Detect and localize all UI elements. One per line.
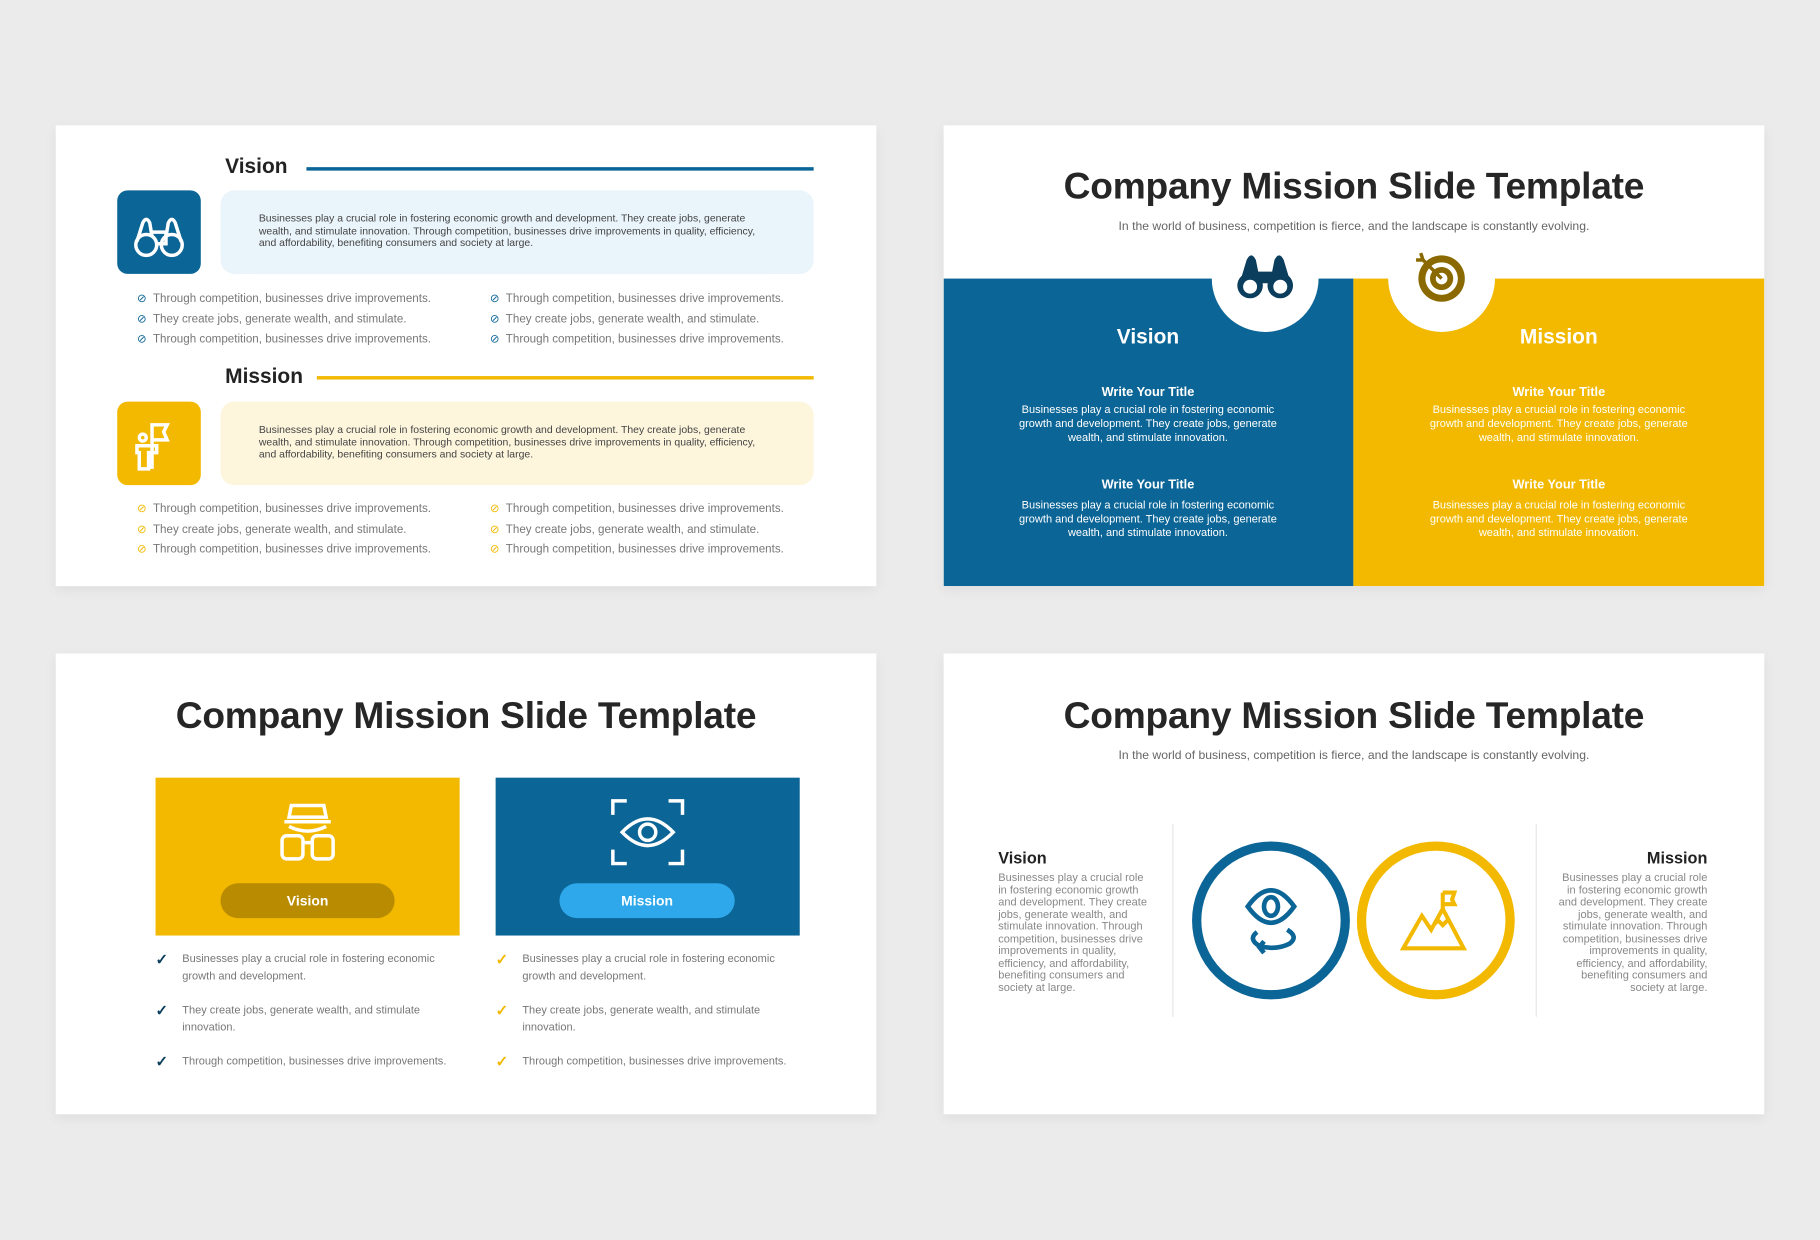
text: mission: Businesses play a crucial role in fostering economic growth and development. They create jobs, generate wealth, and stimulate innovation. Through competition, businesses drive improvements in quality, efficiency, and affordability, benefiting consumers and society at large. <box>1559 872 1707 994</box>
list: mission: ✓ <box>496 1002 508 1019</box>
block: vision: Vision <box>1117 325 1179 348</box>
list: mission <box>496 951 786 1070</box>
text box: vision: Businesses play a crucial role in fostering economic growth and development. They create jobs, generate wealth, and stimulate innovation. Through competition, businesses drive improvements in quality, efficiency, and affordability, benefiting consumers and society at large. <box>259 212 755 249</box>
list: vision: ✓ <box>156 1053 168 1070</box>
text: vision: Businesses play a crucial role in fostering economic growth and development. They create jobs, generate wealth, and stimulate innovation. Through competition, businesses drive improvements in quality, efficiency, and affordability, benefiting consumers and society at large. <box>998 872 1147 994</box>
checklist: vision: ⊘ Through competition, businesses drive improvements. <box>490 292 784 305</box>
block: vision: Businesses play a crucial role in fostering economic growth and development. They create jobs, generate wealth, and stimulate innovation. <box>1019 499 1277 540</box>
card: vision <box>156 778 460 936</box>
checklist: vision: ⊘ They create jobs, generate wealth, and stimulate. <box>490 313 759 326</box>
card: mission <box>496 778 800 936</box>
icon: vision circle <box>1192 842 1350 1000</box>
button: mission: Mission <box>621 893 673 909</box>
block: vision: Businesses play a crucial role in fostering economic growth and development. They create jobs, generate wealth, and stimulate innovation. <box>1019 404 1277 445</box>
checklist: vision: ⊘ Through competition, businesses drive improvements. <box>137 333 431 346</box>
list: vision: ✓ <box>156 1002 168 1019</box>
title: Company Mission Slide Template <box>1064 694 1644 736</box>
panel: cards <box>56 653 876 1114</box>
text: vision: Vision <box>998 848 1047 867</box>
icon: person with flag <box>117 402 201 485</box>
button: mission <box>559 883 735 918</box>
heading: mission: Mission <box>225 364 303 388</box>
title: Company Mission Slide Template <box>176 694 756 736</box>
checklist: mission: ⊘ Through competition, businesses drive improvements. <box>137 503 431 515</box>
subtitle: In the world of business, competition is fierce, and the landscape is constantly evolving. <box>1119 749 1589 763</box>
checklist: mission <box>137 503 784 556</box>
text: mission: Mission <box>1647 848 1707 867</box>
checklist: vision: ⊘ They create jobs, generate wealth, and stimulate. <box>137 313 407 326</box>
title: Company Mission Slide Template <box>1064 165 1644 207</box>
checklist: mission: ⊘ Through competition, businesses drive improvements. <box>490 503 784 515</box>
text box: mission <box>221 402 814 485</box>
list: vision: Through competition, businesses drive improvements. <box>182 1055 446 1068</box>
list: mission: ✓ <box>496 951 508 968</box>
block: vision: Write Your Title <box>1102 478 1194 492</box>
list: mission: ✓ <box>496 1053 508 1070</box>
block: mission: Write Your Title <box>1512 385 1605 399</box>
checklist: mission: ⊘ They create jobs, generate wealth, and stimulate. <box>137 523 407 536</box>
icon: spy binoculars <box>280 804 335 861</box>
block: vision: Write Your Title <box>1102 385 1194 399</box>
icon: binoculars <box>117 190 201 274</box>
panel: circles <box>944 653 1764 1114</box>
checklist: vision: ⊘ Through competition, businesses drive improvements. <box>137 292 431 305</box>
list: vision: ✓ <box>156 951 168 968</box>
list: vision: They create jobs, generate wealth, and stimulate innovation. <box>182 1004 420 1034</box>
block: mission <box>1353 279 1764 586</box>
block: mission: Businesses play a crucial role in fostering economic growth and development. They create jobs, generate wealth, and stimulate innovation. <box>1430 404 1688 445</box>
checklist: mission: ⊘ Through competition, businesses drive improvements. <box>490 543 784 556</box>
checklist: mission: ⊘ They create jobs, generate wealth, and stimulate. <box>490 523 759 536</box>
panel: vision and mission list <box>56 125 876 586</box>
list: mission: They create jobs, generate wealth, and stimulate innovation. <box>522 1004 760 1034</box>
icon: binoculars circle <box>1212 225 1319 332</box>
checklist: vision <box>137 292 784 346</box>
list: vision: Businesses play a crucial role in fostering economic growth and development. <box>182 953 435 983</box>
icon: eye scan <box>611 799 684 866</box>
text box: mission: Businesses play a crucial role in fostering economic growth and development. They create jobs, generate wealth, and stimulate innovation. Through competition, businesses drive improvements in quality, efficiency, and affordability, benefiting consumers and society at large. <box>259 424 755 460</box>
list: mission: Businesses play a crucial role in fostering economic growth and development. <box>522 953 775 983</box>
subtitle: In the world of business, competition is fierce, and the landscape is constantly evolving. <box>1119 219 1589 233</box>
list: vision <box>156 951 446 1070</box>
button: vision: Vision <box>287 893 328 909</box>
block: mission: Businesses play a crucial role in fostering economic growth and development. They create jobs, generate wealth, and stimulate innovation. <box>1430 499 1688 540</box>
text box: vision <box>221 190 814 274</box>
list: mission: Through competition, businesses drive improvements. <box>522 1055 786 1068</box>
checklist: mission: ⊘ Through competition, businesses drive improvements. <box>137 543 431 556</box>
checklist: vision: ⊘ Through competition, businesses drive improvements. <box>490 333 784 346</box>
block: mission: Mission <box>1520 325 1598 348</box>
block: vision <box>944 279 1353 586</box>
heading: vision: Vision <box>225 154 287 178</box>
block: mission: Write Your Title <box>1512 478 1605 492</box>
icon: target circle <box>1388 225 1495 332</box>
panel: split blue/yellow <box>944 125 1764 586</box>
icon: mission circle <box>1356 842 1515 1000</box>
button: vision <box>221 883 395 918</box>
